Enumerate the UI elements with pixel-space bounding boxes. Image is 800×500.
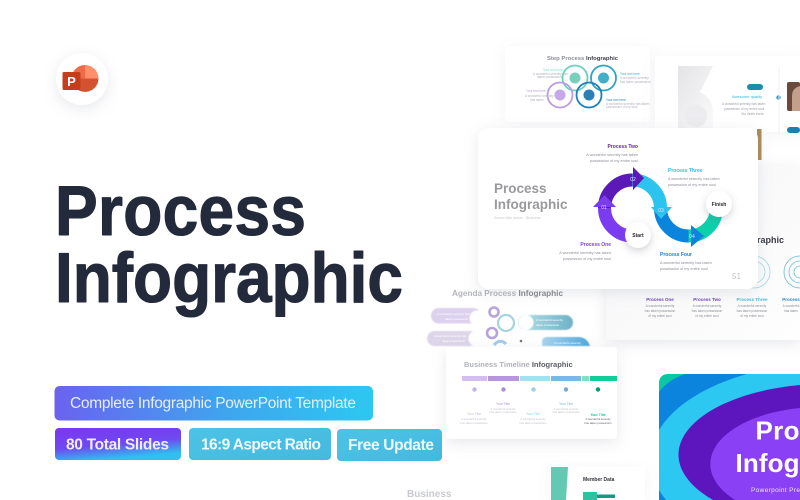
step rings	[548, 66, 616, 108]
arrow head 04	[691, 225, 704, 247]
agenda pill text	[434, 312, 582, 345]
step small text: Your text here	[606, 98, 626, 102]
process labels: Process Two	[693, 297, 721, 302]
timeline text: A wonderful serenity	[585, 417, 611, 421]
process three label	[668, 168, 720, 187]
slide: member data	[551, 467, 645, 500]
cover title	[737, 422, 798, 478]
badge: aspect ratio: 16:9 Aspect Ratio	[201, 436, 321, 454]
timeline labels: Your Title	[526, 412, 540, 416]
step numbers: 02	[630, 177, 636, 183]
tag two	[787, 127, 800, 133]
process one label: A wonderful serenity has taken	[559, 251, 611, 255]
step small text: Your text here	[620, 72, 640, 76]
process labels	[646, 297, 800, 302]
step small text: taken possession	[537, 75, 562, 79]
step small text: A wonderful serenity	[525, 94, 554, 98]
process text: of my entire soul	[695, 314, 719, 318]
badge: total slides: 80 Total Slides	[66, 436, 169, 454]
timeline labels	[467, 402, 606, 417]
process text: of my entire soul	[648, 314, 672, 318]
photo	[787, 82, 800, 111]
badge: aspect ratio	[189, 428, 331, 460]
process text: has taken possession	[737, 309, 768, 313]
slide: process row with rings	[603, 236, 800, 347]
slide: step process infographic	[505, 46, 651, 122]
timeline text: has taken possession	[520, 421, 547, 425]
step numbers	[601, 177, 695, 240]
card heading: Infographic	[494, 197, 568, 212]
start node: Start	[632, 233, 644, 239]
teal tab	[551, 467, 568, 500]
process four label	[660, 252, 712, 271]
start node	[625, 222, 651, 248]
tag text: possession of my entire soul	[724, 107, 765, 111]
process two label	[586, 144, 638, 163]
agenda pill text: A wonderful serenity has	[437, 312, 470, 316]
agenda pill text: taken possession	[536, 323, 560, 327]
badge: free update	[337, 429, 442, 461]
card heading	[494, 181, 568, 212]
title: Infographic	[55, 239, 403, 318]
icon: powerpoint	[56, 53, 108, 105]
segment 5	[688, 208, 716, 236]
s-curve arrows	[604, 180, 716, 236]
process four label: Process Four	[660, 252, 692, 258]
page number: 51	[732, 272, 741, 281]
segment 2	[604, 180, 632, 208]
tag text	[722, 102, 766, 116]
business heading fragment: Business	[407, 489, 452, 500]
process labels: Process Three	[736, 297, 768, 302]
card subtitle: Donec nibh ipsum · Business	[494, 216, 541, 220]
large numeral	[678, 66, 713, 128]
card heading: Process	[494, 181, 547, 196]
process two label: possession of my entire soul	[590, 159, 638, 163]
timeline text: has taken possession	[461, 421, 488, 425]
agenda pill text: A wonderful serenity	[554, 341, 582, 345]
badge: complete template: Complete Infographic PowerPoint Template	[70, 395, 356, 412]
timeline text: A wonderful serenity	[490, 407, 516, 411]
cover title: Pro	[756, 416, 800, 446]
process four label: possession of my entire soul	[660, 267, 708, 271]
finish node	[706, 191, 732, 217]
step small text: has taken	[530, 98, 544, 102]
tag	[747, 84, 763, 90]
agenda pill text: taken possession	[442, 339, 466, 343]
arrow head 01	[593, 195, 616, 207]
title: Process	[55, 172, 306, 251]
timeline bar	[462, 376, 617, 381]
badge: total slides	[55, 428, 181, 460]
process text: A wonderful	[783, 304, 800, 308]
process one label	[559, 242, 611, 261]
cover subtitle: Powerpoint Pre	[751, 487, 800, 494]
title	[55, 172, 403, 318]
badge: free update: Free Update	[348, 437, 434, 454]
rings	[751, 256, 800, 288]
photo strip	[757, 129, 762, 160]
heading: step process: Step Process Infographic	[547, 56, 619, 62]
process two label: A wonderful serenity has taken	[586, 153, 638, 157]
process labels: Process	[782, 297, 800, 302]
step small text: A wonderful serenity	[620, 76, 649, 80]
badge: complete template	[54, 386, 373, 420]
agenda gears	[487, 308, 522, 345]
segment 1	[604, 208, 632, 236]
process three label: Process Three	[668, 168, 703, 174]
timeline labels: Your Title	[467, 412, 481, 416]
tag heading: Awesome quality	[732, 94, 762, 99]
process one label: Process One	[580, 242, 611, 248]
step numbers: 01	[601, 205, 607, 211]
arrow head 03	[651, 207, 672, 219]
icon: powerpoint: P	[67, 74, 76, 89]
member heading: Member Data	[583, 477, 615, 483]
step small text: Your text here	[543, 68, 563, 72]
step small text: possession of my soul	[606, 105, 638, 109]
process text: has taken possession	[645, 309, 676, 313]
timeline text: has taken possession	[490, 410, 517, 414]
step small text: Your text here	[526, 89, 546, 93]
tag text: Our fleets event	[741, 112, 764, 116]
timeline text: A wonderful serenity	[553, 407, 579, 411]
step small text: A wonderful serenity has	[533, 72, 568, 76]
timeline text: has taken possession	[585, 421, 612, 425]
timeline text	[461, 407, 612, 425]
finish node: Finish	[712, 202, 726, 208]
slide: agenda process	[427, 289, 590, 346]
cover title: Infog	[736, 448, 800, 478]
main slide: process infographic card	[478, 128, 762, 289]
process four label: A wonderful serenity has taken	[660, 261, 712, 265]
member bars	[583, 492, 615, 500]
process text: has taken	[784, 309, 798, 313]
timeline dots	[472, 387, 477, 392]
timeline labels: Your Title	[496, 402, 510, 406]
arrow head 02	[633, 167, 644, 190]
timeline labels: Your Title	[559, 402, 573, 406]
timeline heading: Business Timeline Infographic	[464, 360, 573, 369]
step small text	[525, 68, 651, 109]
process text: A wonderful serenity	[646, 304, 675, 308]
agenda pills	[427, 308, 590, 346]
timeline text: A wonderful serenity	[461, 417, 487, 421]
agenda pill text: A wonderful serenity has	[434, 334, 467, 338]
timeline labels: Your Title	[590, 413, 606, 417]
step numbers: 04	[689, 234, 695, 240]
process text: A wonderful serenity	[693, 304, 722, 308]
timeline dot	[776, 95, 781, 100]
process text	[645, 304, 800, 318]
step small text: A wonderful serenity has taken	[606, 102, 650, 106]
cover slide	[659, 374, 800, 500]
process labels: Process One	[646, 297, 674, 302]
tag text: A wonderful serenity has taken	[722, 102, 766, 106]
process one label: possession of my entire soul	[563, 257, 611, 261]
agenda pill text: A wonderful serenity	[536, 318, 564, 322]
process text: A wonderful serenity	[738, 304, 767, 308]
agenda heading: Agenda Process Infographic	[452, 289, 563, 298]
process three label: possession of my entire soul	[668, 183, 716, 187]
heading fragment: raphic	[757, 235, 784, 245]
agenda pill text: taken possession	[445, 317, 469, 321]
timeline text: has taken possession	[553, 410, 580, 414]
process text: has taken possession	[692, 309, 723, 313]
step small text: has taken possession	[620, 80, 651, 84]
segment 3	[632, 180, 660, 208]
step numbers: 03	[658, 208, 664, 214]
process text: of my entire soul	[740, 314, 764, 318]
slide: number six with quality tags	[655, 56, 800, 135]
slide: business timeline	[446, 347, 617, 439]
process two label: Process Two	[608, 144, 638, 150]
process three label: A wonderful serenity has taken	[668, 177, 720, 181]
timeline text: A wonderful serenity	[520, 417, 546, 421]
segment 4	[660, 208, 688, 236]
